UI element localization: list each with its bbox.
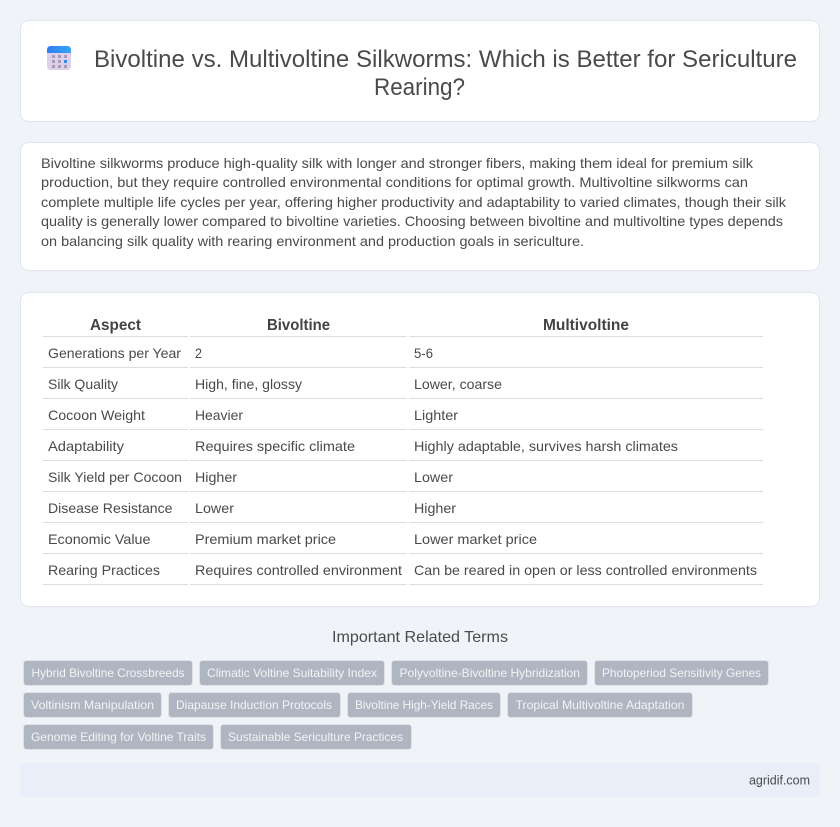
tag: Hybrid Bivoltine Crossbreeds xyxy=(32,666,184,680)
row: silk yield per cocoon: Lower xyxy=(414,469,453,485)
row: silk quality: Lower, coarse xyxy=(414,376,502,392)
table header row xyxy=(90,317,629,334)
row: silk quality: Silk Quality xyxy=(48,376,118,392)
row: cocoon weight: Heavier xyxy=(195,407,243,423)
text block: summary paragraph: on balancing silk quality with rearing environment and production goals in sericulture. xyxy=(41,233,584,249)
table grid lines xyxy=(43,336,763,585)
row: silk quality xyxy=(48,376,502,392)
table header row: Aspect xyxy=(90,317,141,334)
row: silk yield per cocoon: Higher xyxy=(195,469,237,485)
tag xyxy=(200,660,384,686)
row: economic value: Economic Value xyxy=(48,531,151,547)
text block: summary paragraph xyxy=(41,155,787,249)
row: silk quality: High, fine, glossy xyxy=(195,376,302,392)
tag: Sustainable Sericulture Practices xyxy=(228,730,403,744)
tag xyxy=(24,724,214,750)
row: generations per year: 2 xyxy=(195,345,202,361)
tag: Climatic Voltine Suitability Index xyxy=(207,666,377,680)
footer bar xyxy=(20,763,820,797)
title: Bivoltine vs. Multivoltine Silkworms: Which is Better for Sericulture xyxy=(94,46,797,73)
tag xyxy=(24,692,162,718)
row: cocoon weight xyxy=(48,407,458,423)
tag: Polyvoltine-Bivoltine Hybridization xyxy=(400,666,580,680)
tag xyxy=(392,660,588,686)
tag xyxy=(594,660,768,686)
row: disease resistance xyxy=(48,500,456,516)
tag xyxy=(24,660,192,686)
table header row: Bivoltine xyxy=(267,317,330,334)
heading: important related terms: Important Related Terms xyxy=(332,629,508,646)
row: cocoon weight: Cocoon Weight xyxy=(48,407,145,423)
tag: Diapause Induction Protocols xyxy=(176,698,332,712)
panel: title card xyxy=(20,20,820,122)
title: Rearing? xyxy=(374,74,465,101)
text block: summary paragraph: Bivoltine silkworms produce high-quality silk with longer and stronger fibers, making them ideal for premium silk xyxy=(41,155,754,171)
row: generations per year: Generations per Year xyxy=(48,345,181,361)
row: adaptability xyxy=(48,438,678,454)
footer bar: agridif.com xyxy=(749,772,810,788)
row: rearing practices: Rearing Practices xyxy=(48,562,160,578)
tag: Genome Editing for Voltine Traits xyxy=(31,730,206,744)
row: cocoon weight: Lighter xyxy=(414,407,458,423)
panel: summary card xyxy=(20,142,820,270)
row: rearing practices xyxy=(48,562,757,578)
row: economic value xyxy=(48,531,537,547)
row: adaptability: Requires specific climate xyxy=(195,438,355,454)
row: disease resistance: Disease Resistance xyxy=(48,500,173,516)
tag: Bivoltine High-Yield Races xyxy=(355,698,493,712)
title xyxy=(94,46,797,101)
tag xyxy=(348,692,500,718)
tags: related terms xyxy=(24,660,768,750)
row: rearing practices: Requires controlled environment xyxy=(195,562,402,578)
row: silk yield per cocoon: Silk Yield per Cocoon xyxy=(48,469,182,485)
tag xyxy=(220,724,412,750)
row: adaptability: Highly adaptable, survives harsh climates xyxy=(414,438,678,454)
row: disease resistance: Lower xyxy=(195,500,234,516)
tag: Tropical Multivoltine Adaptation xyxy=(516,698,684,712)
row: economic value: Lower market price xyxy=(414,531,537,547)
row: generations per year xyxy=(48,345,433,361)
row: economic value: Premium market price xyxy=(195,531,336,547)
icon: calendar xyxy=(47,46,71,70)
text block: summary paragraph: quality is generally lower compared to bivoltine varieties. Choosing between bivoltine and multivoltine types depends xyxy=(41,213,783,229)
tag: Voltinism Manipulation xyxy=(31,698,154,712)
row: disease resistance: Higher xyxy=(414,500,456,516)
table header row: Multivoltine xyxy=(543,317,629,334)
row: adaptability: Adaptability xyxy=(48,438,124,454)
text block: summary paragraph: complete multiple life cycles per year, offering higher productivity and adaptability to varied climates, though their silk xyxy=(41,194,787,210)
panel: comparison table card xyxy=(20,292,820,606)
row: rearing practices: Can be reared in open or less controlled environments xyxy=(414,562,757,578)
row: silk yield per cocoon xyxy=(48,469,453,485)
text block: summary paragraph: production, but they require controlled environmental conditions for optimal growth. Multivoltine silkworms can xyxy=(41,174,748,190)
tag xyxy=(508,692,692,718)
tag: Photoperiod Sensitivity Genes xyxy=(602,666,761,680)
row: generations per year: 5-6 xyxy=(414,345,433,361)
tag xyxy=(168,692,340,718)
